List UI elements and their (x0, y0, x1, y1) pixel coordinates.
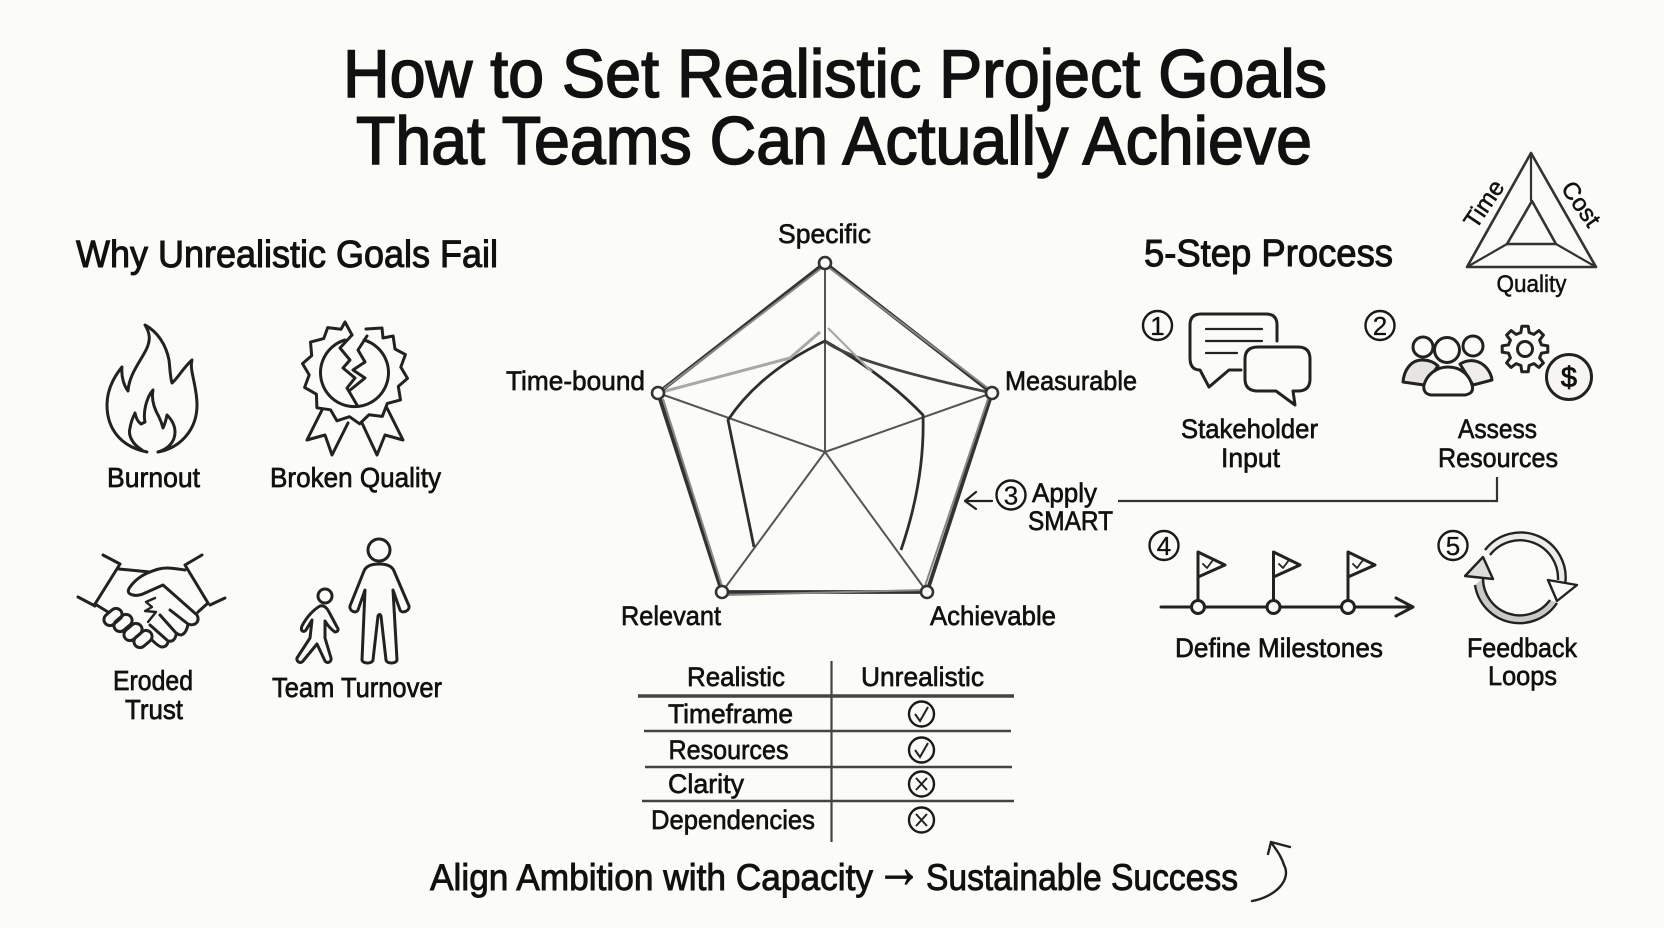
triangle diagram (1467, 153, 1596, 267)
icon: eroded trust handshake (78, 555, 225, 650)
row: resources (668, 735, 934, 765)
label: stakeholder input (1181, 414, 1318, 473)
footer takeaway: → (876, 833, 922, 900)
label: apply SMART: Apply (1032, 478, 1097, 508)
label: assess resources: Assess (1458, 414, 1537, 444)
label: broken quality: Broken Quality (270, 462, 441, 493)
label: feedback loops (1467, 633, 1577, 691)
radar vertices (652, 257, 998, 598)
step number 5: 5 (1446, 531, 1460, 561)
arrow to radar (965, 492, 992, 509)
step 4: define milestones (1150, 531, 1413, 663)
step number 1: 1 (1150, 311, 1165, 341)
label: eroded trust: Eroded (113, 665, 193, 696)
step number 4 (1150, 531, 1178, 561)
label: relevant: Relevant (621, 601, 721, 631)
step 5: feedback loops (1438, 531, 1577, 691)
heading: why unrealistic goals fail: Why Unrealistic Goals Fail (76, 234, 498, 276)
label: assess resources: Resources (1438, 443, 1558, 473)
step number 2: 2 (1373, 311, 1387, 341)
title (343, 36, 1327, 179)
step number 3 (996, 480, 1026, 510)
row: dependencies (651, 805, 934, 835)
radar outer pentagon (658, 263, 992, 595)
radar spokes (658, 263, 992, 592)
step number 1 (1143, 311, 1172, 341)
label: time: Time (1459, 175, 1510, 234)
footer takeaway: Sustainable Success (926, 857, 1238, 898)
connector: step 2 to step 3 (1118, 477, 1497, 501)
column header: unrealistic: Unrealistic (861, 662, 984, 692)
column header: realistic: Realistic (687, 662, 785, 692)
footer takeaway: Align Ambition with Capacity (430, 857, 873, 898)
row: resources: Resources (668, 735, 788, 765)
label: achievable: Achievable (930, 601, 1056, 631)
label: apply SMART (1028, 478, 1113, 536)
label: feedback loops: Feedback (1467, 633, 1577, 663)
label: measurable: Measurable (1005, 366, 1137, 396)
label: stakeholder input: Input (1221, 443, 1280, 473)
step number 4: 4 (1157, 531, 1171, 561)
row: timeframe: Timeframe (668, 699, 793, 729)
label: burnout: Burnout (107, 462, 200, 493)
icon: team turnover people (297, 539, 409, 663)
row: clarity: Clarity (668, 769, 744, 799)
step number 2 (1366, 311, 1394, 341)
step number 5 (1438, 531, 1468, 561)
footer takeaway (430, 833, 1238, 900)
label: specific: Specific (778, 219, 871, 249)
label: eroded trust: Trust (125, 694, 183, 725)
row: clarity (668, 769, 934, 799)
icon: people, gear and dollar: $ (1561, 362, 1577, 394)
icon: people, gear and dollar (1403, 326, 1592, 400)
label: define milestones: Define Milestones (1175, 633, 1383, 663)
label: quality: Quality (1496, 271, 1566, 298)
panel: why unrealistic goals fail (76, 234, 498, 725)
label: feedback loops: Loops (1488, 661, 1557, 691)
label: time-bound: Time-bound (506, 366, 645, 396)
label: eroded trust (113, 665, 193, 725)
icon: broken quality badge (302, 322, 408, 455)
row: timeframe (668, 699, 934, 729)
icon: burnout flame (107, 325, 197, 452)
milestone timeline (1161, 552, 1413, 616)
heading: 5-step process: 5-Step Process (1144, 233, 1393, 275)
row: dependencies: Dependencies (651, 805, 815, 835)
step 3: apply SMART (965, 478, 1113, 536)
iron triangle: time, cost, quality (1459, 153, 1606, 298)
step 2: assess resources (1366, 311, 1592, 473)
table rules (638, 661, 1014, 842)
title: How to Set Realistic Project Goals (343, 36, 1327, 112)
title: That Teams Can Actually Achieve (356, 103, 1312, 179)
icon: curved upward arrow (1252, 842, 1290, 901)
step number 3: 3 (1004, 480, 1018, 510)
label: cost: Cost (1555, 176, 1606, 233)
label: apply SMART: SMART (1028, 506, 1113, 536)
comparison table (638, 661, 1014, 842)
icon: speech bubbles (1190, 314, 1310, 405)
label: team turnover: Team Turnover (272, 672, 442, 703)
panel: 5-step process (965, 233, 1592, 691)
radar inner data shape (658, 328, 992, 550)
panel: SMART radar chart (506, 219, 1137, 631)
icon: feedback cycle (1465, 532, 1577, 623)
label: assess resources (1438, 414, 1558, 473)
label: stakeholder input: Stakeholder (1181, 414, 1318, 444)
step 1: stakeholder input (1143, 311, 1318, 473)
